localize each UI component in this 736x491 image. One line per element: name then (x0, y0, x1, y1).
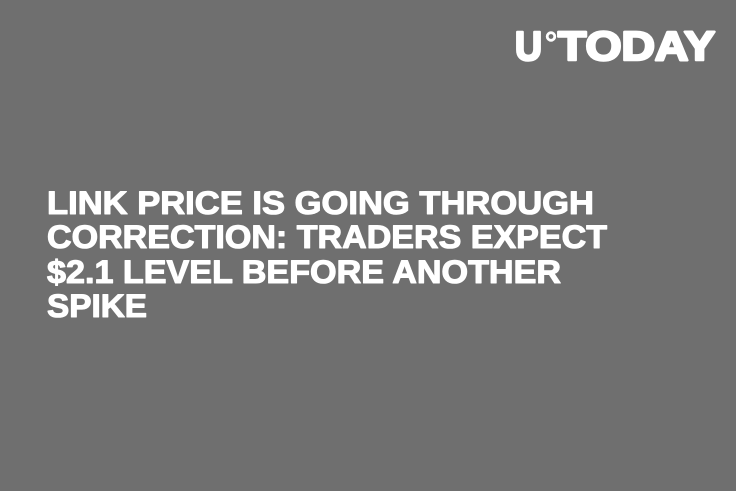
headline line 2: CORRECTION: TRADERS EXPECT (47, 219, 607, 255)
headline line 4: SPIKE (47, 288, 147, 324)
logo: U.Today (515, 23, 715, 69)
logo degree mark (547, 33, 555, 40)
headline (47, 185, 607, 324)
headline line 1: LINK PRICE IS GOING THROUGH (47, 185, 594, 221)
logo letter U: U (515, 23, 542, 69)
logo word TODAY: TODAY (558, 23, 715, 69)
headline line 3: $2.1 LEVEL BEFORE ANOTHER (47, 254, 561, 290)
